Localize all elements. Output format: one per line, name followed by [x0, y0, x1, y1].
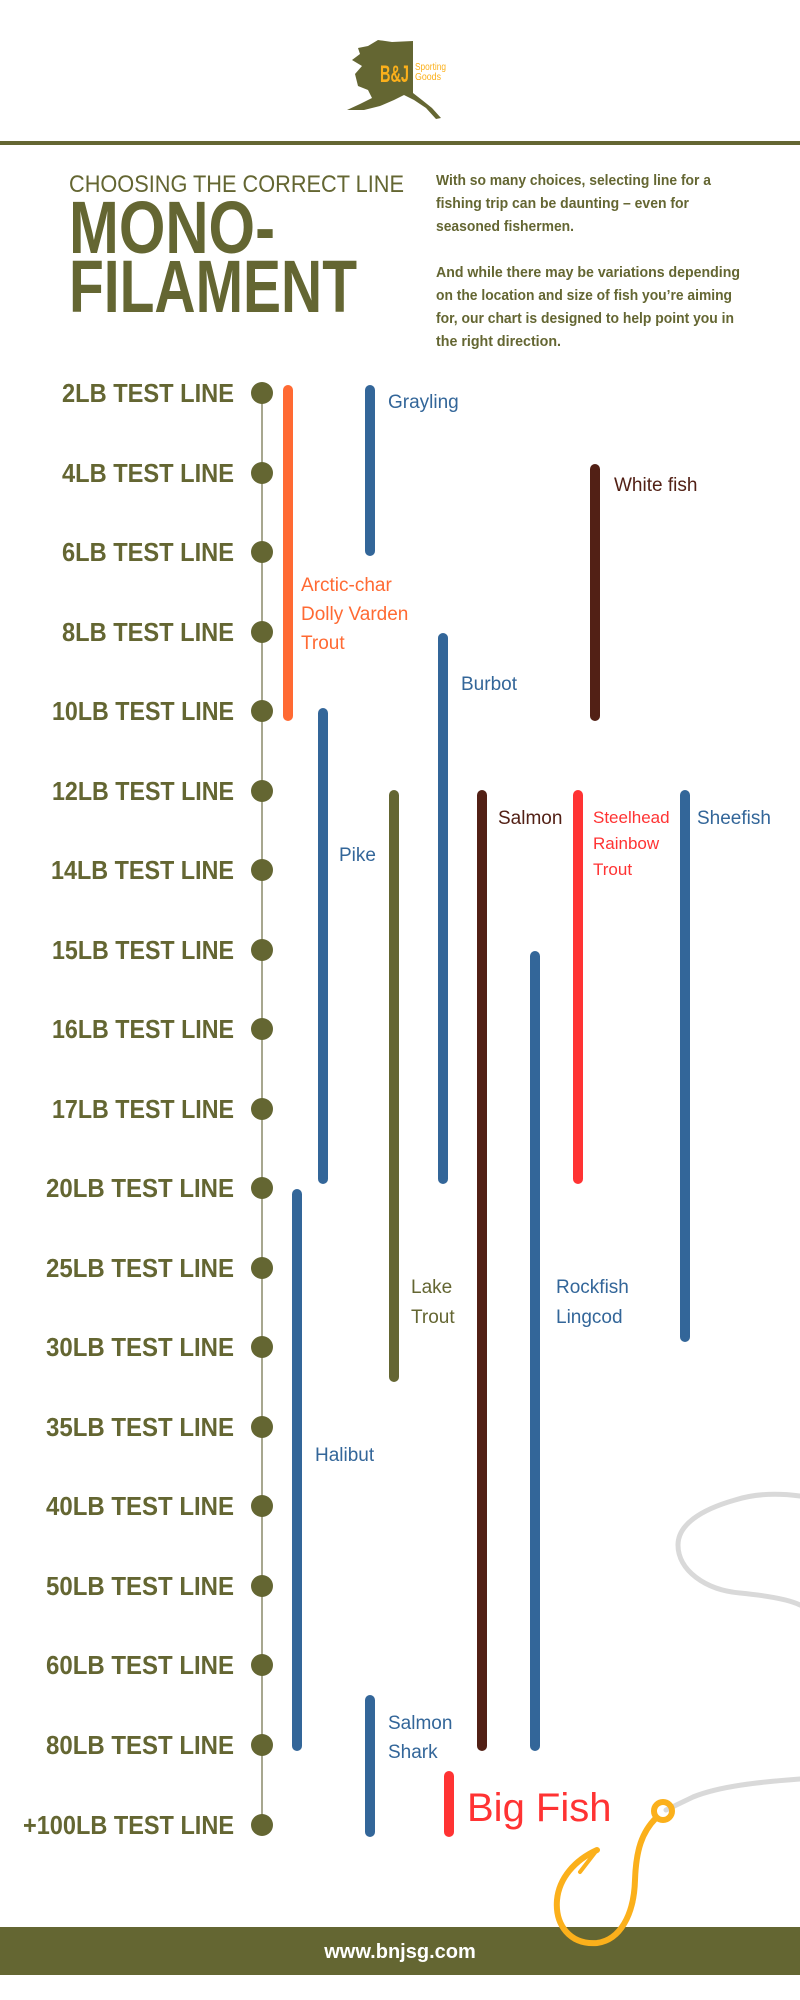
test line labels and dots: 40LB TEST LINE [46, 1491, 234, 1521]
footer: www.bnjsg.com [323, 1941, 476, 1963]
test line labels and dots: 17LB TEST LINE [52, 1094, 234, 1124]
fish labels: Trout [411, 1307, 455, 1328]
fish labels: Rainbow [593, 834, 660, 853]
intro text: on the location and size of fish you’re aiming [436, 287, 732, 304]
dots [251, 382, 273, 1836]
test line labels and dots: 2LB TEST LINE [62, 378, 234, 408]
title [69, 171, 404, 328]
test line labels and dots: 25LB TEST LINE [46, 1253, 234, 1283]
intro text: And while there may be variations depending [436, 264, 740, 281]
fish labels: Lake [411, 1277, 452, 1298]
test line labels and dots: 30LB TEST LINE [46, 1332, 234, 1362]
fish labels: Trout [301, 633, 345, 654]
intro text: seasoned fishermen. [436, 218, 574, 235]
test line labels and dots: 12LB TEST LINE [52, 776, 234, 806]
fish labels [301, 392, 771, 1830]
test line labels and dots: 8LB TEST LINE [62, 617, 234, 647]
intro text: fishing trip can be daunting – even for [436, 195, 689, 212]
fish labels: Pike [339, 845, 376, 866]
intro text: for, our chart is designed to help point you in [436, 310, 734, 327]
axis line [261, 393, 263, 1825]
fish labels: Dolly Varden [301, 604, 408, 625]
test line labels and dots: 6LB TEST LINE [62, 537, 234, 567]
fish labels: Rockfish [556, 1277, 629, 1298]
fish labels: Halibut [315, 1445, 375, 1466]
title: CHOOSING THE CORRECT LINE [69, 171, 404, 198]
test line labels and dots: 14LB TEST LINE [51, 855, 234, 885]
fish labels: Sheefish [697, 808, 771, 829]
logo: B&J [380, 61, 409, 88]
fish labels: White fish [614, 475, 697, 496]
test line labels and dots: 80LB TEST LINE [46, 1730, 234, 1760]
test line labels and dots: 20LB TEST LINE [46, 1173, 234, 1203]
logo: Sporting [415, 62, 446, 73]
intro text: With so many choices, selecting line for a [436, 172, 712, 189]
fish labels: Steelhead [593, 808, 670, 827]
logo: Goods [415, 72, 441, 83]
footer [0, 1927, 800, 1975]
test line labels and dots: 35LB TEST LINE [46, 1412, 234, 1442]
intro text: the right direction. [436, 333, 561, 350]
fishing line [666, 1494, 800, 1810]
fish labels: Burbot [461, 674, 518, 695]
fish labels: Salmon [498, 808, 562, 829]
fish labels: Big Fish [467, 1786, 612, 1830]
title: FILAMENT [69, 245, 357, 328]
test line labels and dots: 50LB TEST LINE [46, 1571, 234, 1601]
fish labels: Lingcod [556, 1307, 623, 1328]
test line labels and dots: +100LB TEST LINE [23, 1810, 234, 1840]
fish labels: Arctic-char [301, 575, 392, 596]
icon: hook [557, 1802, 672, 1943]
fish labels: Grayling [388, 392, 459, 413]
test line labels and dots: 4LB TEST LINE [62, 458, 234, 488]
fish labels: Salmon [388, 1713, 452, 1734]
test line labels and dots [23, 378, 234, 1840]
bars [288, 390, 685, 1832]
test line labels and dots: 16LB TEST LINE [52, 1014, 234, 1044]
title: MONO- [69, 186, 275, 269]
test line labels and dots: 10LB TEST LINE [52, 696, 234, 726]
test line labels and dots: 15LB TEST LINE [52, 935, 234, 965]
fish labels: Shark [388, 1742, 438, 1763]
fish labels: Trout [593, 860, 632, 879]
logo [347, 40, 446, 119]
test line labels and dots: 60LB TEST LINE [46, 1650, 234, 1680]
intro text [436, 172, 740, 350]
